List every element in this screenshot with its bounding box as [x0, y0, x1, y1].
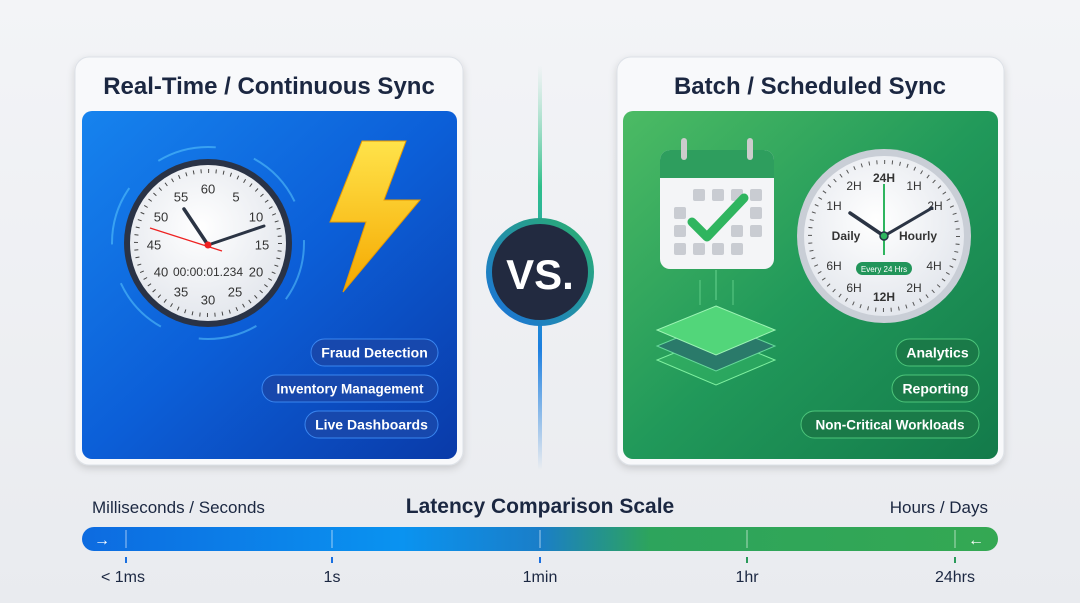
icon: schedule clock: Hourly	[899, 229, 937, 243]
icon: schedule clock: 1H	[826, 199, 842, 213]
icon: lightning bolt	[330, 141, 420, 292]
icon: calendar	[660, 138, 774, 269]
icon: schedule clock: 4H	[926, 259, 942, 273]
icon: stacked data layers	[657, 270, 775, 385]
tags: batch use cases	[801, 339, 979, 438]
icon: stopwatch clock: 00:00:01.234	[173, 265, 243, 279]
latency scale	[82, 495, 998, 586]
icon: schedule clock: 1H	[906, 179, 922, 193]
icon: stopwatch clock: 50	[154, 210, 168, 224]
heading: real-time: Real-Time / Continuous Sync	[103, 73, 435, 100]
tags: real-time use cases: Fraud Detection	[321, 344, 428, 360]
icon: stopwatch clock: 55	[174, 190, 188, 204]
blue inner panel	[82, 111, 457, 459]
latency scale: →	[94, 532, 110, 549]
icon: stopwatch clock: 25	[228, 284, 242, 300]
heading: batch: Batch / Scheduled Sync	[674, 73, 946, 100]
icon: stopwatch clock: 15	[255, 238, 269, 252]
tick labels: 24hrs	[935, 569, 975, 586]
icon: schedule clock: 2H	[927, 199, 943, 213]
icon: stopwatch clock: 45	[147, 238, 161, 252]
latency scale: ←	[968, 532, 984, 549]
tags: batch use cases: Non-Critical Workloads	[815, 418, 965, 432]
icon: stopwatch clock: 5	[232, 190, 240, 204]
icon: schedule clock: Every 24 Hrs	[861, 265, 907, 274]
icon: schedule clock: 6H	[826, 259, 842, 273]
icon: stopwatch clock: 35	[174, 284, 188, 300]
tags: real-time use cases: Live Dashboards	[315, 416, 428, 432]
icon: schedule clock: 6H	[846, 281, 862, 295]
VS badge: VS.	[506, 251, 574, 298]
tags: batch use cases: Reporting	[902, 380, 969, 396]
icon: stopwatch clock: 60	[201, 182, 215, 196]
gradient bar	[82, 527, 998, 551]
scale labels: Milliseconds / Seconds	[92, 498, 265, 517]
latency scale: Hours / Days	[890, 498, 988, 517]
icon: schedule clock	[797, 149, 971, 323]
icon: stopwatch clock: 30	[201, 292, 215, 308]
tick labels: 1min	[523, 569, 557, 586]
panel: real-time sync	[75, 57, 463, 465]
tick labels: 1s	[324, 569, 340, 586]
tags: batch use cases: Analytics	[906, 344, 969, 360]
VS badge	[486, 218, 594, 326]
tick labels: < 1ms	[101, 569, 145, 586]
icon: stopwatch clock	[112, 147, 304, 339]
icon: schedule clock: 2H	[846, 179, 862, 193]
divider line	[538, 65, 542, 470]
icon: schedule clock: 2H	[906, 281, 922, 295]
icon: stopwatch clock: 10	[249, 210, 263, 224]
panel: batch sync	[617, 57, 1004, 465]
tick labels	[101, 569, 975, 586]
latency scale: Latency Comparison Scale	[406, 495, 674, 518]
tick labels: 1hr	[735, 569, 759, 586]
icon: stopwatch clock: 20	[249, 264, 263, 280]
icon: schedule clock: Daily	[832, 229, 861, 243]
tags: real-time use cases: Inventory Management	[276, 382, 424, 396]
tags: real-time use cases	[262, 339, 438, 438]
icon: stopwatch clock: 40	[154, 264, 168, 280]
green inner panel	[623, 111, 998, 459]
icon: schedule clock: 12H	[873, 290, 895, 304]
icon: schedule clock: 24H	[873, 171, 895, 185]
